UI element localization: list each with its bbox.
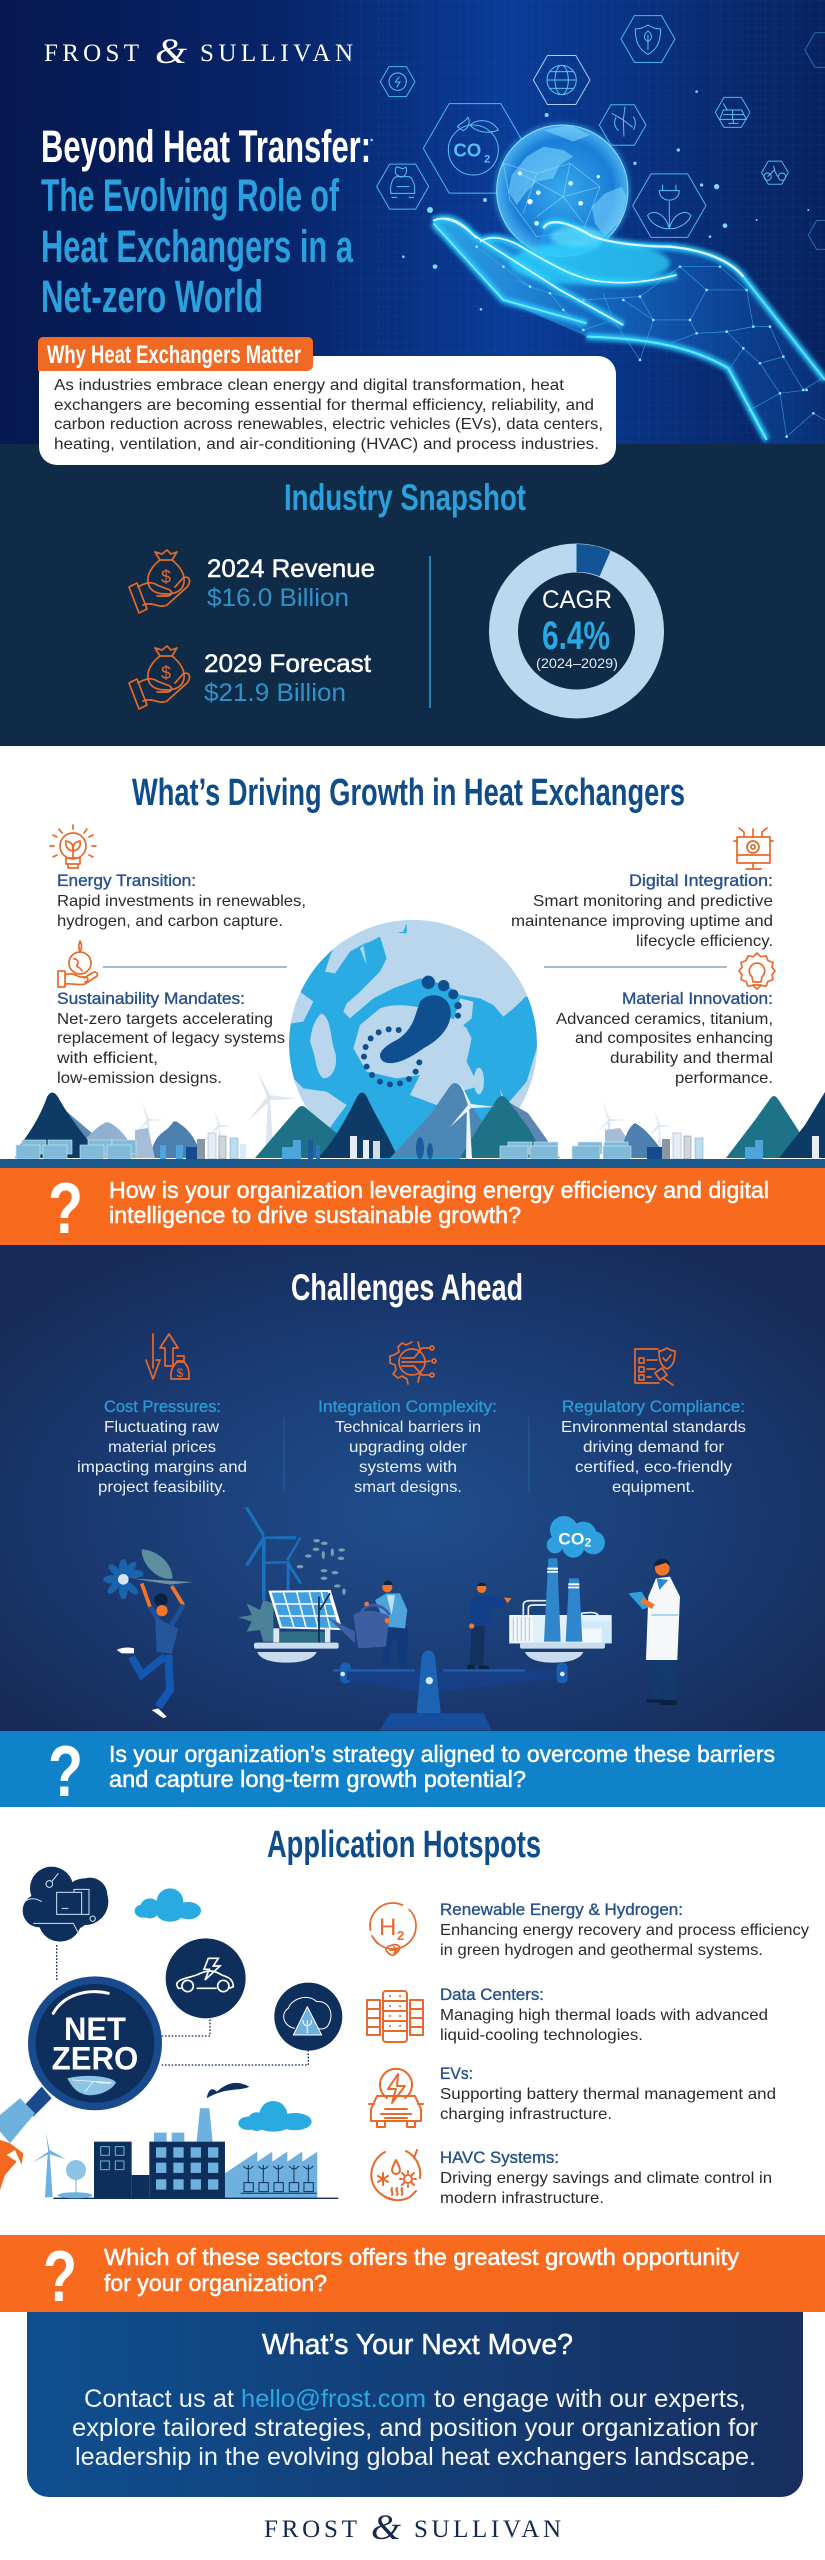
- title: The Evolving Role of: [41, 170, 340, 221]
- icon: integration gear circuit: [390, 1342, 436, 1384]
- text: cost pressures: impacting margins and: [77, 1459, 247, 1476]
- logo: frost and sullivan footer: [264, 2507, 561, 2547]
- icon: material innovation gear bulb: [739, 953, 775, 989]
- magnifying glass: ZERO: [52, 2040, 138, 2076]
- panel: industry snapshot: [0, 444, 825, 746]
- text: integration complexity: Technical barriers in: [335, 1419, 481, 1436]
- text: material innovation: Advanced ceramics, titanium,: [556, 1011, 773, 1028]
- text: integration complexity: Integration Complexity:: [318, 1397, 497, 1416]
- illustration: mountain and city landscape: [0, 1070, 825, 1168]
- magnifying glass: NET: [64, 2011, 126, 2047]
- text: sustainability mandates: low-emission designs.: [57, 1070, 222, 1087]
- illustration: glowing hand holding globe with hexagon icons: 2: [484, 154, 490, 166]
- text: regulatory compliance: [561, 1397, 746, 1496]
- text: digital integration: Smart monitoring and predictive: [533, 893, 773, 910]
- icon: money bag on hand 2024: [129, 550, 190, 613]
- gardener: [382, 1628, 408, 1666]
- icon: price fluctuation: $: [177, 1366, 184, 1380]
- question text: Is your organization’s strategy aligned to overcome these barriers: [109, 1741, 775, 1767]
- question text: and capture long-term growth potential?: [109, 1766, 526, 1792]
- icon: money bag on hand 2029: $: [161, 663, 171, 683]
- text: digital integration: maintenance improving uptime and: [511, 913, 773, 930]
- question text: How is your organization leveraging energy efficiency and digital: [109, 1177, 769, 1203]
- icon: question mark: ?: [48, 1732, 83, 1812]
- illustration: woman with flower and leaf: [103, 1549, 193, 1718]
- body text: As industries embrace clean energy and digital transformation, heat: [54, 377, 565, 394]
- panel: next move call to action: [27, 2312, 803, 2497]
- dark cloud with icons: [23, 1867, 108, 1942]
- stat: 2024 revenue: 2024 Revenue: [207, 555, 375, 583]
- stat: 2029 forecast: $21.9 Billion: [204, 679, 346, 707]
- question text: for your organization?: [104, 2270, 327, 2296]
- text: digital integration: lifecycle efficiency.: [636, 933, 773, 950]
- text: digital integration: Digital Integration:: [629, 871, 773, 890]
- callout: why heat exchangers matter: [38, 337, 616, 465]
- co2 cloud: 2: [585, 1535, 592, 1549]
- text: hvac systems: modern infrastructure.: [440, 2190, 604, 2207]
- text: material innovation: [556, 989, 773, 1087]
- icon: hydrogen: H: [379, 1914, 396, 1941]
- text: material innovation: performance.: [675, 1070, 773, 1087]
- logo: frost and sullivan header: FROST: [44, 40, 139, 67]
- illustration: left scale pan with turbines solar panel and gardener: [238, 1507, 408, 1666]
- text: integration complexity: upgrading older: [349, 1439, 468, 1456]
- buildings: [160, 1133, 819, 1159]
- icon: ev charging car: [369, 2069, 423, 2127]
- icon: question mark: ?: [43, 2237, 77, 2317]
- panel: growth drivers: [0, 746, 825, 1168]
- text: sustainability mandates: Net-zero targets accelerating: [57, 1011, 273, 1028]
- logo: frost and sullivan footer: SULLIVAN: [414, 2516, 561, 2543]
- icon hexagons: [377, 16, 825, 249]
- icon: hvac cycle: [371, 2150, 420, 2200]
- panel: application hotspots: [0, 1807, 825, 2235]
- icon: question mark: ?: [48, 1169, 83, 1249]
- text: material innovation: durability and thermal: [610, 1050, 773, 1067]
- callout band: orange question two: [0, 2235, 825, 2317]
- icon: money bag on hand 2029: [129, 646, 190, 709]
- left pan: [254, 1643, 339, 1649]
- chart: cagr donut: 6.4%: [542, 614, 610, 658]
- text: renewable energy and hydrogen: in green hydrogen and geothermal systems.: [440, 1942, 763, 1959]
- cta text: explore tailored strategies, and position your organization for: [72, 2414, 758, 2442]
- text: energy transition: hydrogen, and carbon capture.: [57, 913, 283, 930]
- question text: [109, 1741, 775, 1792]
- icon: energy bulb: [50, 825, 96, 868]
- body text: heating, ventilation, and air-conditioning (HVAC) and process industries.: [54, 436, 599, 453]
- icon: digital integration: [734, 828, 773, 869]
- body text: exchangers are becoming essential for thermal efficiency, reliability, and: [54, 397, 594, 414]
- logo: frost and sullivan footer: &: [371, 2507, 401, 2547]
- icon: price fluctuation: [146, 1334, 189, 1380]
- text: energy transition: [57, 871, 306, 930]
- panel: hero: [0, 0, 825, 450]
- body text: [54, 377, 603, 453]
- illustration: balance scale beam and right side factory: [333, 1516, 680, 1730]
- text: integration complexity: systems with: [359, 1459, 457, 1476]
- logo: frost and sullivan header: SULLIVAN: [200, 40, 353, 67]
- cloud circle: [274, 1983, 342, 2051]
- cta text: to engage with our experts,: [434, 2385, 746, 2413]
- text: evs: Supporting battery thermal management and: [440, 2086, 776, 2103]
- icon: hydrogen: [370, 1903, 416, 1955]
- text: sustainability mandates: Sustainability Mandates:: [57, 989, 245, 1008]
- text: hvac systems: Driving energy savings and climate control in: [440, 2170, 772, 2187]
- solar panel: [268, 1590, 343, 1630]
- text: integration complexity: [318, 1397, 497, 1496]
- text: cost pressures: [77, 1397, 247, 1496]
- cta text: [72, 2385, 758, 2471]
- text: cost pressures: Cost Pressures:: [104, 1397, 221, 1416]
- chart: cagr donut: [504, 544, 650, 704]
- callout band: orange question one: [0, 1168, 825, 1249]
- co2 cloud: CO: [558, 1530, 584, 1549]
- footprint: [361, 976, 462, 1087]
- heading: application hotspots: Application Hotspots: [267, 1824, 541, 1866]
- text: digital integration: [511, 871, 773, 950]
- text: hvac systems: [440, 2148, 772, 2207]
- icon: hydrogen: 2: [397, 1928, 404, 1943]
- light blue cloud: [135, 1888, 201, 1922]
- scientist: [652, 1660, 677, 1700]
- tab heading: Why Heat Exchangers Matter: [47, 341, 301, 369]
- dotted connectors: [57, 1945, 308, 2065]
- illustration: net zero magnifier and factory: [0, 1867, 342, 2198]
- text: renewable energy and hydrogen: Renewable Energy & Hydrogen:: [440, 1900, 683, 1919]
- text: energy transition: Rapid investments in renewables,: [57, 893, 306, 910]
- text: sustainability mandates: replacement of legacy systems: [57, 1030, 285, 1047]
- text: hvac systems: HAVC Systems:: [440, 2148, 559, 2167]
- hexagon glyphs: [389, 25, 786, 229]
- text: sustainability mandates: with efficient,: [56, 1050, 158, 1067]
- text: cost pressures: material prices: [108, 1439, 216, 1456]
- logo: frost and sullivan footer: FROST: [264, 2516, 357, 2543]
- chart: cagr donut: (2024–2029): [536, 655, 618, 671]
- wireframe globe: [494, 122, 631, 259]
- man talking: [470, 1625, 485, 1665]
- title: [41, 121, 371, 322]
- text: cost pressures: Fluctuating raw: [104, 1419, 219, 1436]
- magnifying glass: [0, 1976, 162, 2190]
- chart: cagr donut: CAGR: [542, 586, 612, 614]
- text: regulatory compliance: driving demand for: [583, 1439, 725, 1456]
- logo: frost and sullivan header: &: [155, 31, 187, 71]
- icon: sustainability globe in hand: [58, 941, 98, 987]
- icon: money bag on hand 2024: $: [161, 567, 171, 587]
- solar panels: [16, 1140, 631, 1159]
- text: evs: EVs:: [440, 2064, 473, 2083]
- title: Net-zero World: [41, 271, 263, 322]
- text: data centers: Data Centers:: [440, 1985, 544, 2004]
- text: sustainability mandates: [56, 989, 285, 1087]
- heading: challenges ahead: Challenges Ahead: [291, 1267, 523, 1308]
- icon: data center servers: [367, 1991, 423, 2042]
- text: regulatory compliance: Regulatory Compliance:: [562, 1397, 745, 1416]
- text: regulatory compliance: certified, eco-friendly: [575, 1459, 732, 1476]
- text: data centers: liquid-cooling technologies.: [440, 2027, 643, 2044]
- ev circle: [166, 1938, 246, 2018]
- co2 label: CO: [453, 140, 481, 161]
- foliage: [238, 1600, 273, 1642]
- stat: 2029 forecast: 2029 Forecast: [204, 650, 371, 678]
- glowing hand: [432, 218, 825, 450]
- co2 cloud: [547, 1516, 605, 1558]
- stat: 2024 revenue: [207, 555, 375, 612]
- question text: intelligence to drive sustainable growth?: [109, 1202, 521, 1228]
- heading: industry snapshot: Industry Snapshot: [284, 477, 526, 518]
- title: Beyond Heat Transfer:: [41, 121, 371, 172]
- body text: carbon reduction across renewables, electric vehicles (EVs), data centers,: [54, 416, 603, 433]
- text: data centers: Managing high thermal loads with advanced: [440, 2007, 768, 2024]
- illustration: globe with footprint: [289, 920, 537, 1159]
- text: renewable energy and hydrogen: [440, 1900, 809, 1959]
- cta text: hello@frost.com: [241, 2385, 426, 2413]
- text: evs: charging infrastructure.: [440, 2106, 612, 2123]
- text: material innovation: and composites enhancing: [575, 1030, 773, 1047]
- cta heading: What’s Your Next Move?: [262, 2329, 573, 2361]
- illustration: glowing hand holding globe with hexagon icons: [370, 16, 825, 450]
- wind turbine center: [450, 1082, 495, 1158]
- cta text: Contact us at: [84, 2385, 234, 2413]
- cta text: leadership in the evolving global heat exchangers landscape.: [75, 2443, 756, 2471]
- icon: regulatory checklist: [635, 1348, 675, 1385]
- stat: 2024 revenue: $16.0 Billion: [207, 584, 349, 612]
- text: energy transition: Energy Transition:: [57, 871, 196, 890]
- tab heading: [38, 337, 313, 371]
- stat: 2029 forecast: [204, 650, 371, 707]
- text: material innovation: Material Innovation:: [622, 989, 773, 1008]
- factory and greenhouse: [32, 2083, 338, 2198]
- text: regulatory compliance: equipment.: [612, 1479, 695, 1496]
- question text: [109, 1177, 769, 1228]
- factory: [523, 1601, 600, 1622]
- text: regulatory compliance: Environmental standards: [561, 1419, 746, 1436]
- logo: frost and sullivan header: [44, 39, 352, 64]
- text: evs: [440, 2064, 776, 2123]
- text: integration complexity: smart designs.: [354, 1479, 462, 1496]
- text: data centers: [440, 1985, 768, 2044]
- panel: challenges ahead: [0, 1245, 825, 1731]
- text: renewable energy and hydrogen: Enhancing energy recovery and process efficiency: [440, 1922, 809, 1939]
- callout band: blue question: [0, 1731, 825, 1812]
- text: cost pressures: project feasibility.: [98, 1479, 226, 1496]
- question text: Which of these sectors offers the greatest growth opportunity: [104, 2244, 740, 2270]
- title: Heat Exchangers in a: [41, 221, 354, 272]
- light particles: [370, 90, 809, 311]
- question text: [104, 2244, 740, 2296]
